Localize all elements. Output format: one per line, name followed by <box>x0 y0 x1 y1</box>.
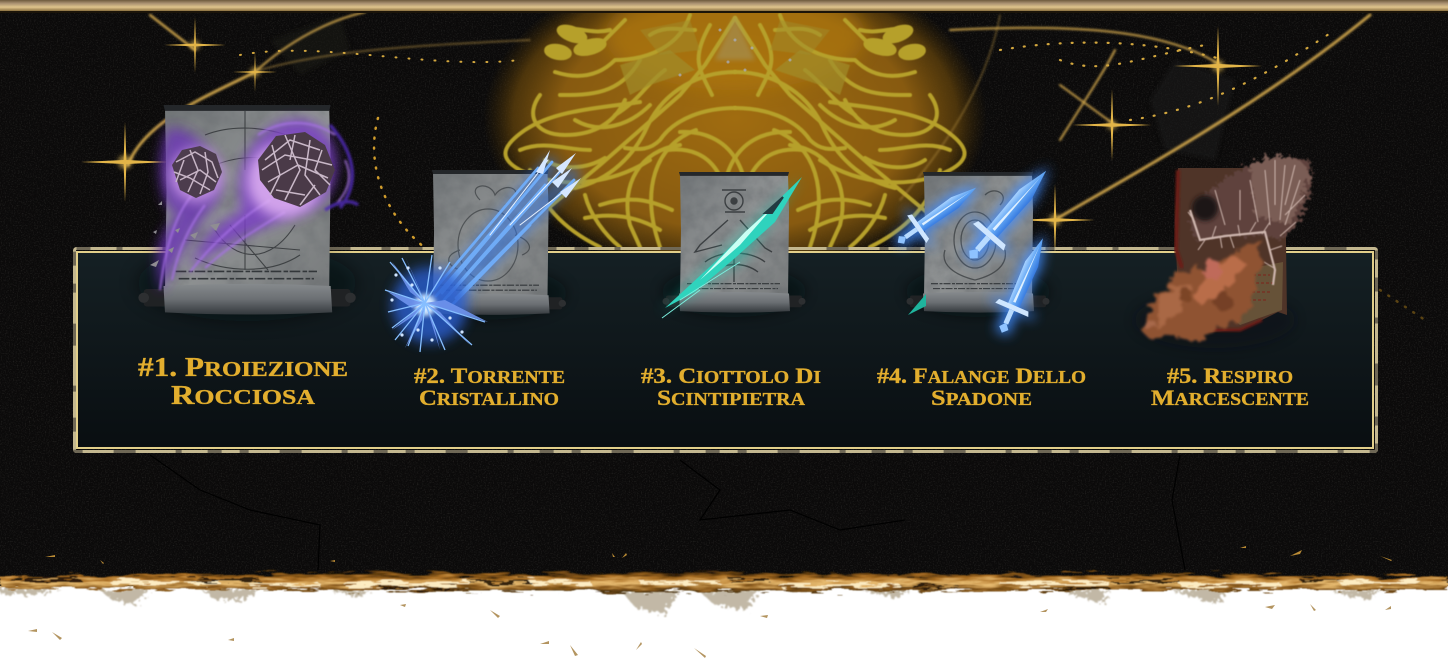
icon: rock debris <box>150 201 220 267</box>
icon: crest sketch <box>944 191 1005 280</box>
icon: crest sketch <box>695 190 772 282</box>
torn white bottom edge with gold band <box>0 546 1448 658</box>
icon: pale fibrous growth <box>1188 156 1311 285</box>
label: spell 1: #1. P ROIEZIONE <box>138 352 348 382</box>
label: spell 2 <box>414 363 565 410</box>
icon: compass sketch on scroll <box>185 110 300 270</box>
icon: glowing swords <box>885 150 1069 342</box>
label: spell 3: #3. C IOTTOLO DI <box>641 363 821 388</box>
gold magic streaks and sparkles <box>118 12 1425 320</box>
spell 2: torrente cristallino art <box>385 150 581 352</box>
grey-gold torn flecks on white <box>0 588 1380 614</box>
icon: purple aura <box>157 120 337 292</box>
rough gold band <box>0 572 1448 592</box>
label: spell 4: SPADONE <box>931 385 1032 410</box>
label: spell 3: SCINTIPIETRA <box>657 385 805 410</box>
label: spell 5 <box>1151 363 1309 410</box>
icon: ornate frame sketch <box>449 186 529 281</box>
spell 3: ciottolo di scintipietra art <box>660 172 806 318</box>
icon: rotted scroll <box>1175 168 1287 332</box>
icon: crystal spears <box>434 160 576 305</box>
icon: teal residue <box>908 294 926 315</box>
label: spell 4 <box>877 363 1086 410</box>
label: spell 2: CRISTALLINO <box>419 385 559 410</box>
label: spell 3 <box>641 363 821 410</box>
label: spell 2: #2. T ORRENTE <box>414 363 565 388</box>
spell 4: falange dello spadone art <box>885 150 1069 342</box>
label: spell 1 <box>138 352 348 410</box>
gold celtic emblem <box>483 0 987 278</box>
icon: teal stone shard <box>660 177 802 318</box>
spell 1: proiezione rocciosa art <box>138 105 358 321</box>
icon: decay cloud <box>1142 240 1262 345</box>
panel: spell ranking box <box>74 248 1376 452</box>
label: spell 5: #5. R ESPIRO <box>1167 363 1293 388</box>
spell labels <box>138 352 1309 410</box>
spell 5: respiro marcescente art <box>1135 156 1311 348</box>
icon: small boulder <box>170 146 224 202</box>
icon: large boulder <box>247 132 335 218</box>
label: spell 5: MARCESCENTE <box>1151 385 1309 410</box>
label: spell 1: ROCCIOSA <box>171 380 316 410</box>
sparkle stars <box>81 17 1262 256</box>
icon: crystal burst <box>385 255 488 352</box>
small gold flecks <box>28 604 1391 658</box>
top gold border <box>0 0 1448 13</box>
label: spell 4: #4. FALANGE DELLO <box>877 363 1086 388</box>
